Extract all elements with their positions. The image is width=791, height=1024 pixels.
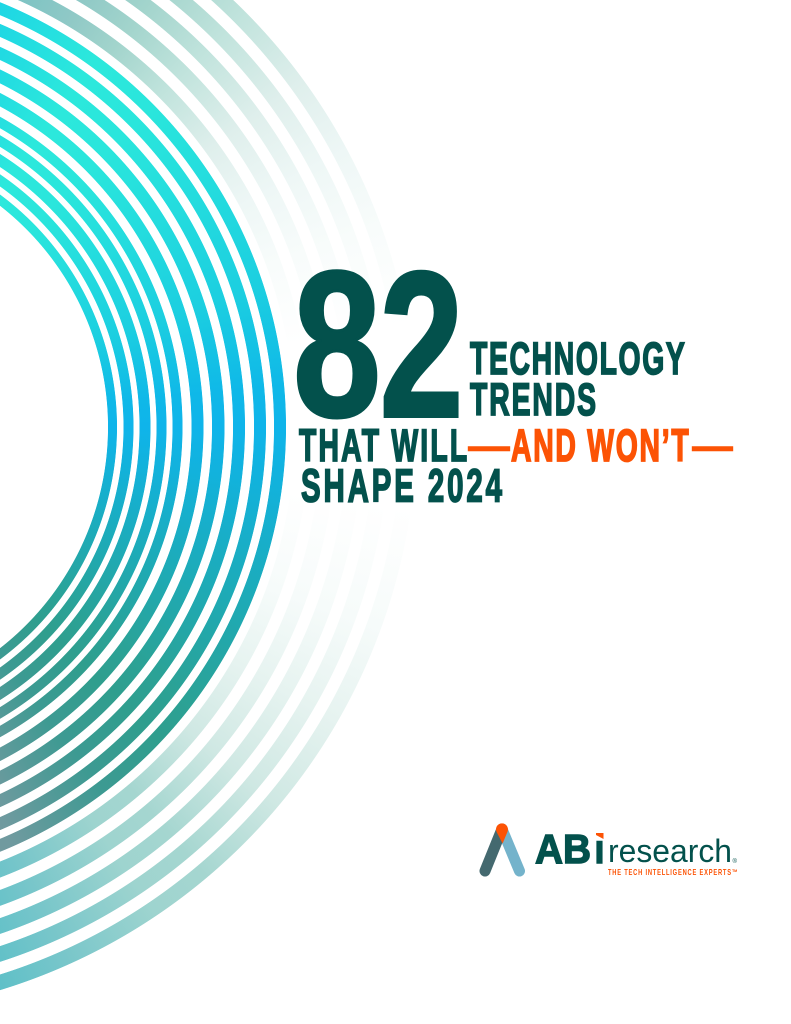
orange dash left: —: [468, 420, 510, 471]
logo tagline: THE TECH INTELLIGENCE EXPERTS™: [608, 869, 738, 877]
bold concentric arcs: [0, 2, 286, 852]
logo wordmark: [535, 826, 738, 872]
heading line: that will: THAT WILL: [299, 420, 467, 471]
heading line: technology: TECHNOLOGY: [470, 333, 685, 384]
logo wordmark: i: [594, 826, 604, 872]
logo wordmark: AB: [535, 826, 591, 872]
number 82: [293, 229, 464, 462]
heading line: shape 2024: SHAPE 2024: [301, 461, 502, 512]
number 82: 8: [293, 229, 381, 461]
orange phrase: AND WON’T: [511, 420, 689, 471]
logo wordmark: ®: [732, 858, 738, 865]
logo mark: [485, 823, 520, 871]
faint outer arcs: [0, 0, 384, 990]
orange dash right: —: [692, 420, 733, 471]
heading line: trends: TRENDS: [470, 374, 596, 425]
number 82: 2: [380, 230, 464, 462]
logo wordmark: research: [608, 833, 732, 869]
